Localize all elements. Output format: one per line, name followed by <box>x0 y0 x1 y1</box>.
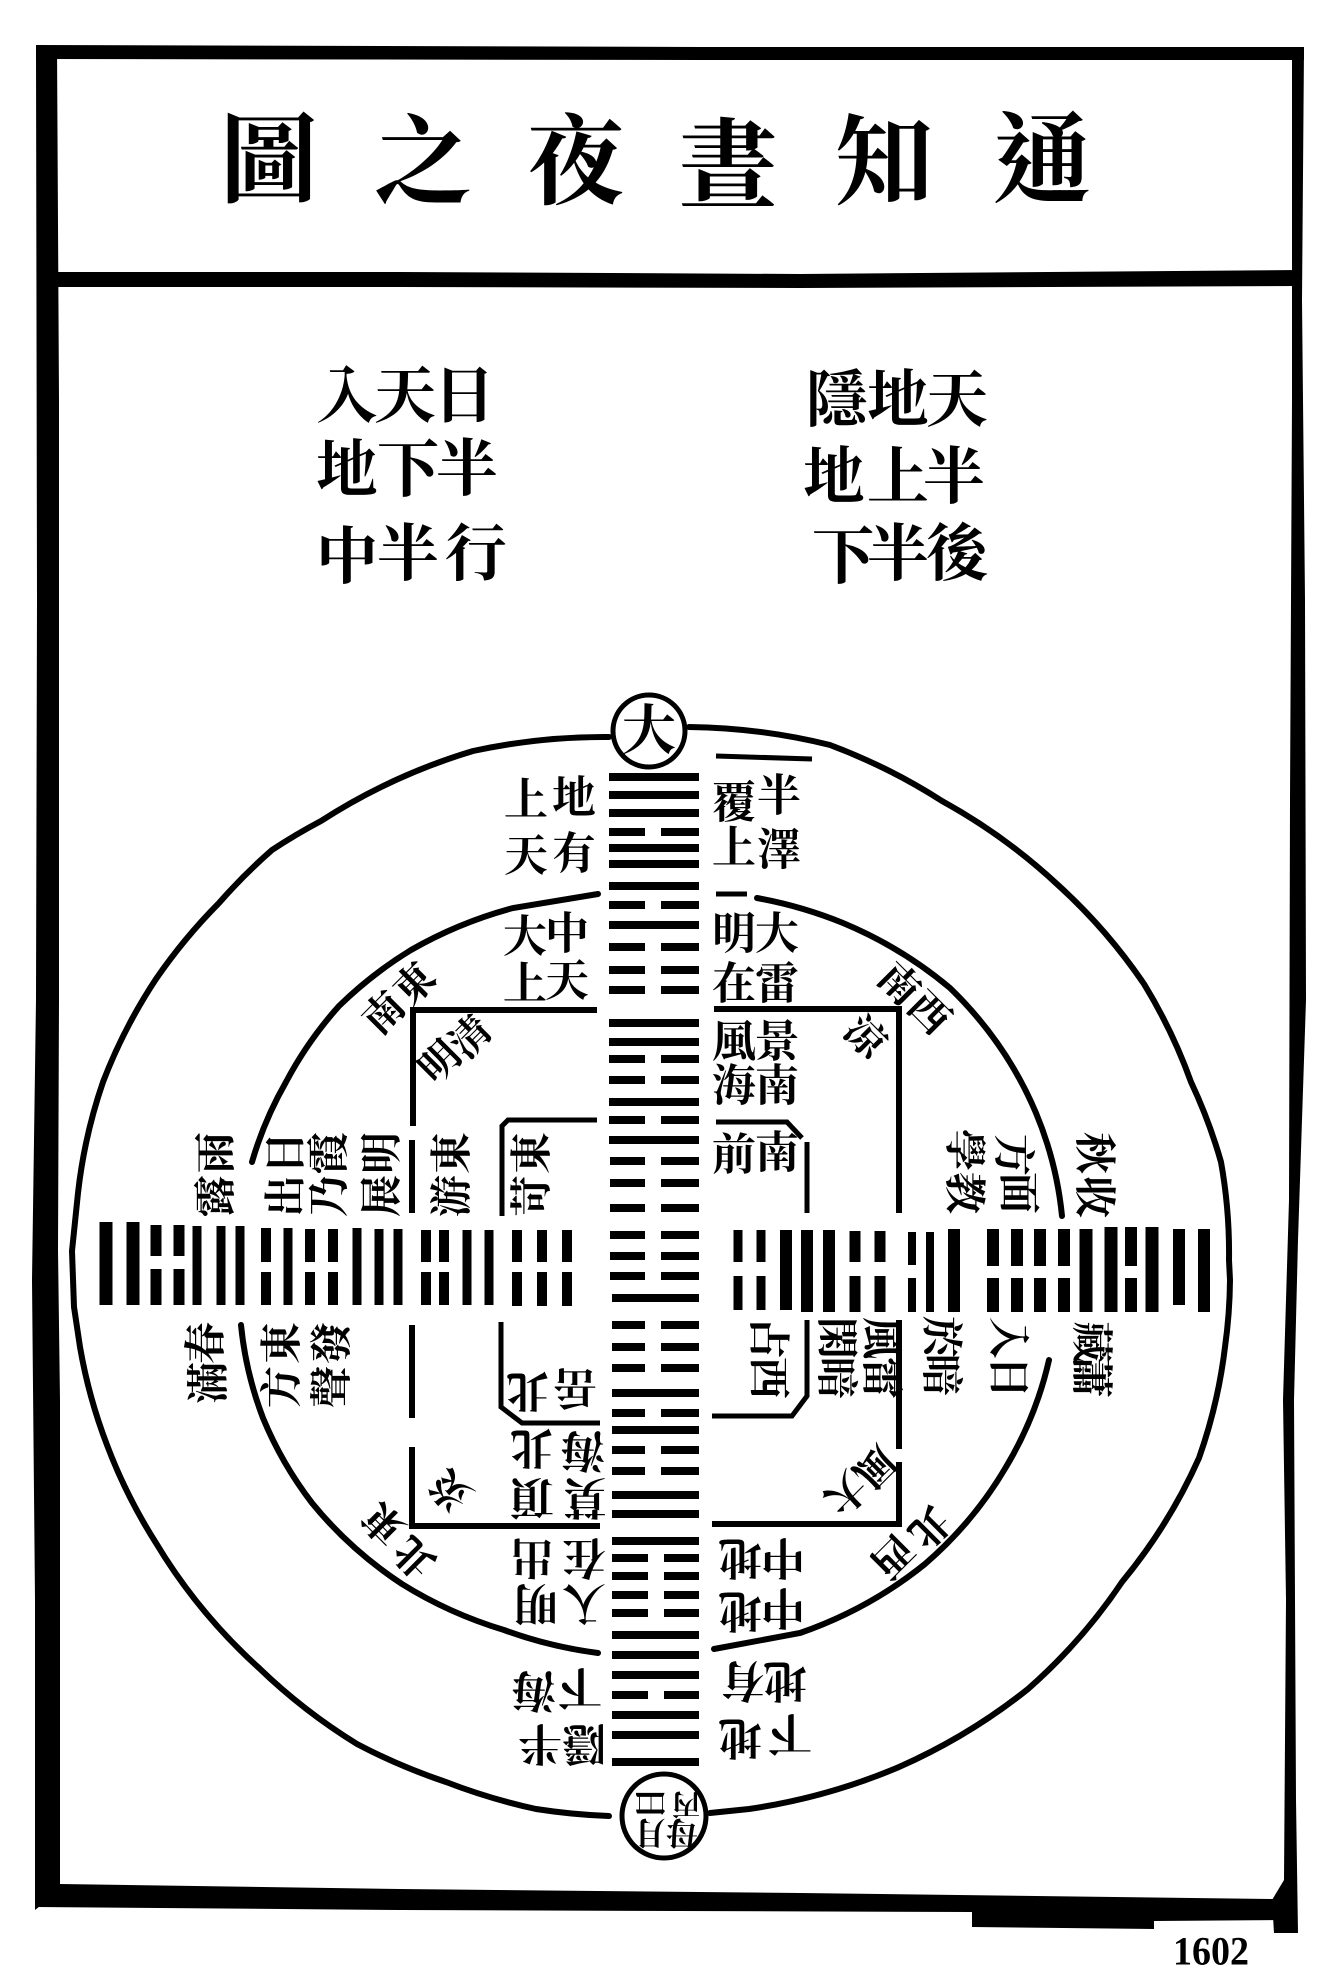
north labels: 明 <box>712 910 756 958</box>
vertical hexagram spine <box>609 777 699 1762</box>
north labels: 澤 <box>757 826 801 874</box>
north labels: 上 <box>504 776 548 824</box>
north labels: 前 <box>712 1130 756 1180</box>
south labels: 隱 <box>560 1718 606 1768</box>
north labels: 南 <box>755 1128 799 1178</box>
north labels: 中 <box>545 910 589 958</box>
south labels: 有 <box>721 1656 765 1704</box>
west labels: 春 <box>183 1322 230 1364</box>
east labels: 藏 <box>1067 1321 1114 1363</box>
east labels: 入 <box>984 1317 1030 1359</box>
text block: right verse: 隱 <box>806 367 871 435</box>
text block: left verse: 半 <box>436 436 498 504</box>
text block: right verse: 地 <box>803 444 865 512</box>
south labels <box>506 1362 812 1768</box>
north labels: 上 <box>503 960 547 1008</box>
icon: top circle: 大 <box>622 701 676 761</box>
diagonal labels: 北 <box>385 1527 445 1587</box>
south labels: 頂 <box>508 1472 554 1522</box>
south labels: 中 <box>761 1532 805 1582</box>
west labels: 雨 <box>194 1132 240 1174</box>
south labels: 中 <box>761 1582 805 1632</box>
diagonal labels: 南 <box>869 954 929 1014</box>
north labels: 天 <box>545 956 589 1006</box>
south labels: 下 <box>557 1662 602 1712</box>
east labels: 風 <box>857 1317 903 1359</box>
north labels: 半 <box>757 772 801 820</box>
east labels: 學 <box>940 1128 987 1171</box>
north labels: 海 <box>712 1062 756 1110</box>
title: 之 <box>374 110 472 218</box>
east labels: 教 <box>940 1172 987 1214</box>
north labels: 天 <box>504 832 548 880</box>
north labels: 地 <box>552 774 596 822</box>
icon: bottom circle: 丙 <box>672 1788 700 1820</box>
south labels: 半 <box>518 1718 562 1768</box>
diagonal labels: 東 <box>354 1493 414 1553</box>
text block: right verse: 上 <box>867 444 929 512</box>
north labels: 南 <box>755 1062 799 1110</box>
east labels: 方 <box>989 1134 1036 1176</box>
west labels: 聲 <box>309 1366 356 1408</box>
text block: right verse: 後 <box>926 520 991 589</box>
text block: left verse <box>316 363 507 592</box>
text block: right verse: 半 <box>923 444 985 512</box>
diagram: outer circle <box>72 727 1230 1816</box>
diagonal labels: 風 <box>845 1437 905 1497</box>
west labels: 發 <box>309 1322 356 1364</box>
west labels: 游 <box>429 1175 476 1217</box>
title: 晝 <box>679 114 777 222</box>
diagonal labels: 西 <box>899 983 959 1043</box>
east labels: 日 <box>984 1356 1030 1398</box>
diagonal labels: 西 <box>862 1526 922 1586</box>
text block: right verse: 天 <box>926 367 988 435</box>
east labels: 秋 <box>1070 1132 1117 1174</box>
east labels: 面 <box>994 1172 1040 1214</box>
west labels: 展 <box>360 1175 406 1217</box>
title <box>220 108 1091 222</box>
diagonal labels: 東 <box>385 954 445 1014</box>
north labels: 大 <box>755 910 799 958</box>
text block: right verse: 下 <box>812 524 875 592</box>
north labels: 大 <box>503 912 547 962</box>
text block: left verse: 入 <box>316 363 378 431</box>
title: 夜 <box>527 110 625 218</box>
horizontal hexagram row: west <box>106 1222 567 1306</box>
west labels: 滿 <box>186 1362 233 1404</box>
page number: 1602 <box>1173 1928 1249 1974</box>
south labels: 在 <box>562 1532 606 1582</box>
south labels: 地 <box>763 1656 807 1704</box>
south labels: 北 <box>506 1366 550 1414</box>
text block: left verse: 天 <box>374 363 436 431</box>
south labels: 地 <box>718 1586 762 1634</box>
north labels: 上 <box>712 824 756 872</box>
west labels: 霞 <box>306 1132 353 1174</box>
south labels: 地 <box>718 1532 762 1582</box>
south labels: 出 <box>510 1532 554 1582</box>
horizontal hexagram row: east <box>738 1227 1204 1312</box>
text block: left verse: 日 <box>433 363 495 431</box>
title: 通 <box>993 108 1091 216</box>
diagram: square frame lines <box>412 1009 899 1526</box>
text block: left verse: 地 <box>316 437 378 505</box>
east labels: 暗 <box>812 1357 859 1399</box>
west labels: 苛 <box>509 1175 556 1217</box>
text block: right verse: 地 <box>867 367 929 435</box>
south labels: 海 <box>561 1426 605 1474</box>
north labels: 覆 <box>712 778 756 828</box>
west labels <box>183 1132 556 1408</box>
diagram: inner circle <box>241 894 1062 1653</box>
west labels: 露 <box>193 1175 240 1217</box>
diagonal labels: 大 <box>815 1463 875 1523</box>
diagonal labels: 明 <box>410 1032 470 1092</box>
north labels: 在 <box>712 960 756 1008</box>
north labels: 風 <box>712 1018 756 1066</box>
east labels: 占 <box>744 1317 791 1359</box>
text block: left verse: 下 <box>377 437 440 505</box>
text block: right verse <box>803 367 991 592</box>
south labels: 下 <box>767 1708 812 1758</box>
east labels <box>744 1128 1117 1399</box>
north labels: 有 <box>552 830 596 878</box>
south labels: 岳 <box>553 1362 597 1412</box>
diagram: inner bracket lines <box>501 756 812 1423</box>
text block: left verse: 中 <box>316 524 378 592</box>
east labels: 閑 <box>812 1317 858 1359</box>
diagonal labels: 涼 <box>835 1007 897 1069</box>
diagonal labels: 北 <box>899 1497 959 1557</box>
diagonal labels: 炎 <box>419 1458 481 1520</box>
east labels: 於 <box>917 1316 964 1359</box>
title: 知 <box>835 110 933 218</box>
text block: left verse: 半 <box>377 521 439 589</box>
west labels: 乃 <box>307 1175 353 1217</box>
north labels <box>503 772 801 1180</box>
icon: top circle <box>613 695 685 767</box>
text block: left verse: 行 <box>445 521 507 589</box>
south labels: 入 <box>562 1578 606 1628</box>
west labels: 東 <box>509 1132 556 1174</box>
west labels: 明 <box>360 1132 406 1174</box>
west labels: 東 <box>429 1132 476 1174</box>
icon: bottom circle: 日 <box>632 1787 668 1819</box>
south labels: 莫 <box>562 1472 607 1522</box>
east labels: 西 <box>744 1357 790 1399</box>
text block: right verse: 半 <box>867 521 929 589</box>
south labels: 地 <box>718 1712 762 1762</box>
diagonal labels <box>354 954 959 1587</box>
north labels: 景 <box>755 1018 800 1066</box>
east labels: 雷 <box>857 1357 904 1399</box>
west labels: 日 <box>264 1132 310 1174</box>
west labels: 方 <box>259 1366 306 1408</box>
icon: bottom circle <box>622 1774 706 1858</box>
icon: bottom circle: 母 <box>666 1815 698 1851</box>
east labels: 暗 <box>917 1354 964 1396</box>
east labels: 收 <box>1070 1176 1117 1218</box>
east labels: 蕭 <box>1067 1356 1114 1398</box>
title: 圖 <box>220 108 318 216</box>
south labels: 明 <box>514 1578 558 1628</box>
south labels: 海 <box>512 1666 556 1714</box>
north labels: 雷 <box>755 960 799 1008</box>
diagonal labels: 南 <box>354 983 414 1043</box>
diagonal labels: 清 <box>441 1007 501 1067</box>
south labels: 北 <box>510 1422 554 1472</box>
icon: bottom circle: 月 <box>634 1815 666 1851</box>
west labels: 出 <box>264 1175 310 1217</box>
west labels: 東 <box>259 1322 306 1364</box>
